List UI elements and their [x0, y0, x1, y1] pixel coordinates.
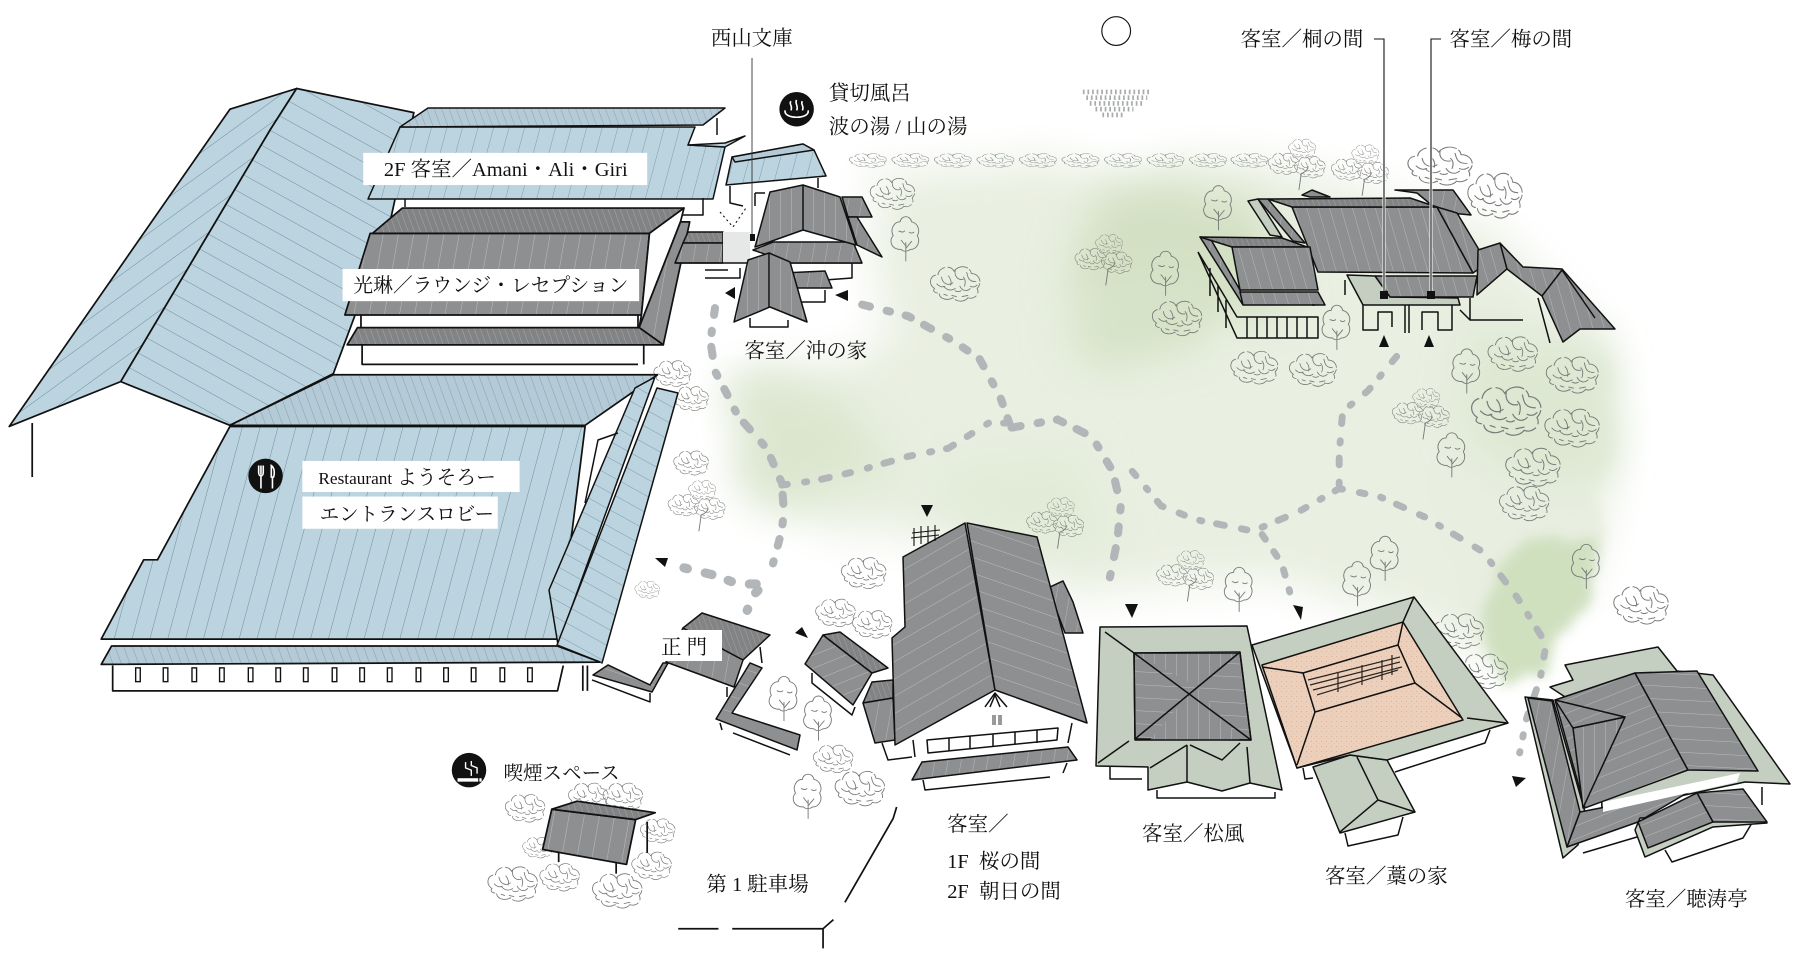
label: parking: 第 1 駐車場 — [706, 873, 809, 896]
label: Sakura and Asahi: 客室／ — [947, 813, 1009, 836]
label: Ume-no-ma: 客室／梅の間 — [1450, 28, 1572, 51]
label: Matsukaze: 客室／松風 — [1142, 822, 1244, 845]
label: Kiri-no-ma: 客室／桐の間 — [1241, 28, 1363, 51]
icon: restaurant — [248, 459, 283, 493]
label: main gate — [657, 630, 722, 661]
parking lot outline — [678, 807, 897, 948]
building: Sakura and Asahi guest rooms — [805, 523, 1087, 790]
label: Sakura and Asahi — [947, 813, 1061, 903]
label: Warabi-no-ie: 客室／藁の家 — [1325, 865, 1448, 888]
building: large gabled wing (blue roof) — [9, 89, 414, 477]
label: Nishiyama library: 西山文庫 — [711, 27, 793, 50]
label: Korin lounge: 光琳／ラウンジ・レセプション — [353, 275, 628, 297]
hedge row — [849, 154, 1268, 167]
building: smoking hut — [543, 801, 655, 874]
building: Chotoutei guest house — [1525, 647, 1790, 862]
label: 2F guest rooms — [363, 153, 647, 185]
leader: Nishiyama library — [720, 58, 755, 241]
building: restaurant and lobby (blue roof) — [101, 375, 678, 691]
label: restaurant: Restaurant ようそろー — [318, 467, 496, 489]
building: 2F guest rooms (blue roof) — [368, 108, 745, 215]
leader: Ume-no-ma — [1427, 39, 1441, 299]
label: main gate: 正 門 — [661, 637, 707, 659]
label: Korin lounge — [343, 269, 639, 301]
label: 2F guest rooms: 2F 客室／Amani・Ali・Giri — [384, 158, 628, 181]
building: Korin lounge and reception (grey roof) — [345, 208, 690, 364]
building: Warabi thatched guest house — [1252, 597, 1508, 846]
leader: Kiri-no-ma — [1374, 39, 1388, 299]
label: Sakura and Asahi: 1F 桜の間 — [947, 850, 1040, 873]
label: entrance lobby: エントランスロビー — [320, 505, 494, 526]
green watercolour garden wash — [736, 161, 1612, 690]
icon: smoking area — [452, 753, 486, 787]
building: main gate — [592, 613, 800, 755]
label: entrance lobby — [302, 497, 498, 529]
building: Matsukaze guest room — [1096, 626, 1282, 798]
label: smoking area: 喫煙スペース — [503, 762, 620, 784]
entrance arrows — [655, 287, 1526, 787]
label: restaurant — [302, 461, 520, 492]
label: Oki-no-ie: 客室／沖の家 — [744, 339, 867, 362]
building: upper garden guest rooms — [1198, 190, 1615, 343]
mist speckle — [1083, 92, 1152, 115]
icon: hot spring — [779, 92, 814, 126]
moon — [1102, 17, 1131, 45]
stepping-stone paths — [684, 305, 1546, 753]
label: private bath — [829, 82, 967, 138]
building: Nishiyama library — [726, 144, 826, 206]
label: private bath: 貸切風呂 — [829, 82, 911, 105]
trees and shrubs — [488, 139, 1668, 908]
building: Oki-no-ie guest house — [675, 185, 882, 327]
label: Sakura and Asahi: 2F 朝日の間 — [947, 880, 1061, 903]
label: private bath: 波の湯 / 山の湯 — [829, 115, 967, 138]
label: Chotoutei: 客室／聴涛亭 — [1625, 888, 1748, 911]
